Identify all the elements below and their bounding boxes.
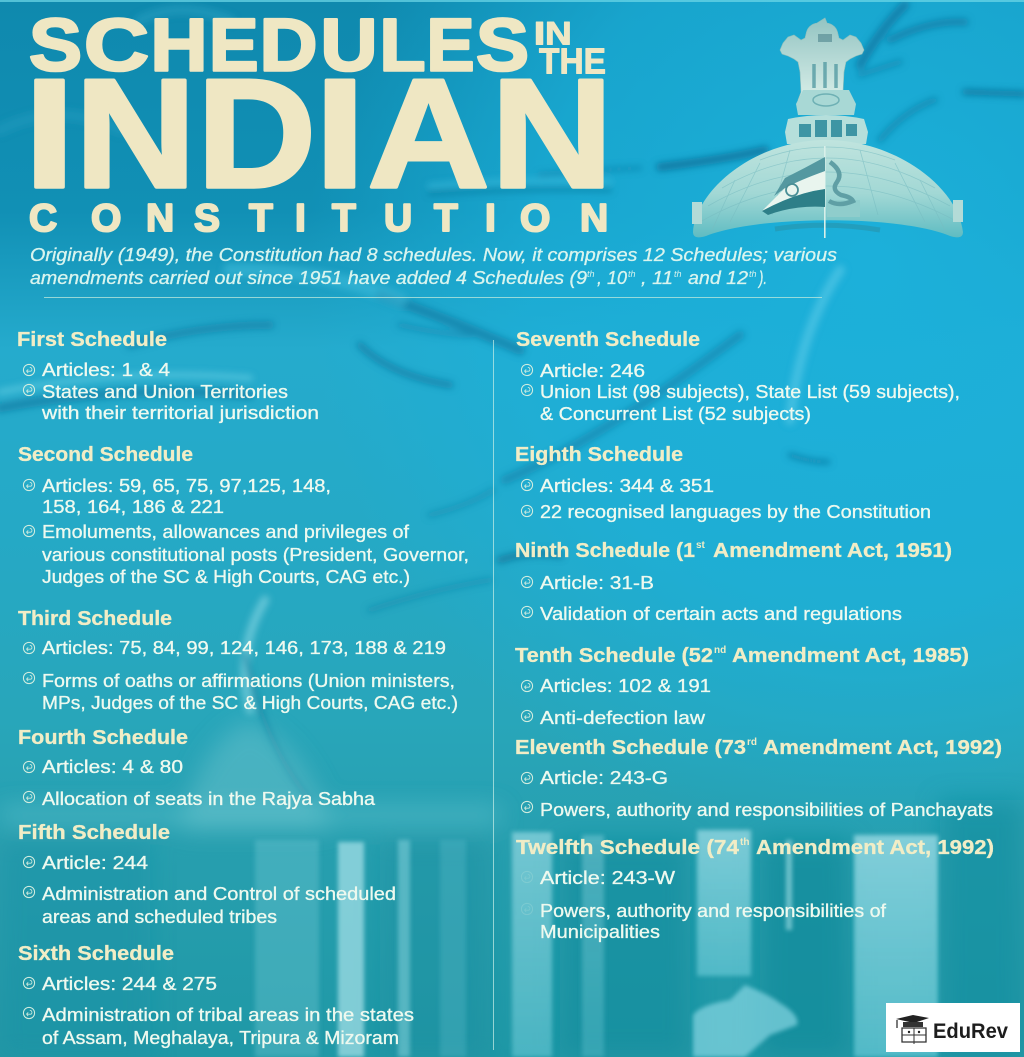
panel: right column — [515, 329, 1002, 942]
First Schedule: First Schedule — [17, 329, 167, 351]
title small: IN THE — [534, 16, 606, 82]
title line: SCHEDULES: E — [209, 4, 258, 86]
logo: EduRev: EduRev — [933, 1020, 1008, 1043]
Tenth Schedule — [515, 645, 969, 728]
Fifth Schedule — [18, 822, 396, 927]
title line: SCHEDULES — [29, 4, 529, 86]
Eleventh Schedule: Eleventh Schedule (73 — [515, 737, 746, 759]
Third Schedule: MPs, Judges of the SC & High Courts, CAG etc.) — [42, 693, 458, 713]
title line: SCHEDULES: L — [380, 4, 426, 86]
Tenth Schedule: Articles: 102 & 191 — [540, 676, 711, 696]
Third Schedule: Third Schedule — [18, 608, 172, 630]
panel: left column — [17, 329, 469, 1048]
Seventh Schedule: Article: 246 — [540, 361, 645, 381]
Ninth Schedule: Article: 31-B — [540, 573, 654, 593]
Ninth Schedule: Amendment Act, 1951) — [713, 540, 952, 562]
ornament on dome — [827, 162, 860, 217]
title line: SCHEDULES: S — [29, 4, 82, 86]
Seventh Schedule: Seventh Schedule — [516, 329, 700, 351]
Fourth Schedule — [18, 727, 376, 809]
intro text: , 11 — [641, 268, 673, 288]
title line: INDIAN: D — [197, 47, 316, 220]
Tenth Schedule: nd — [714, 645, 726, 656]
title line: INDIAN — [24, 47, 613, 220]
intro text: Originally (1949), the Constitution had 8 schedules. Now, it comprises 12 Schedules; various — [30, 245, 837, 265]
Fifth Schedule: areas and scheduled tribes — [42, 907, 277, 927]
Eleventh Schedule: rd — [747, 737, 757, 748]
title line: INDIAN: N — [491, 47, 613, 220]
Twelfth Schedule: Municipalities — [540, 922, 660, 942]
Sixth Schedule — [18, 943, 414, 1048]
dome — [692, 140, 963, 237]
First Schedule: Articles: 1 & 4 — [42, 360, 170, 380]
Seventh Schedule: & Concurrent List (52 subjects) — [540, 404, 811, 424]
intro text: and 12 — [688, 268, 748, 288]
Eighth Schedule: Eighth Schedule — [515, 444, 683, 466]
Fourth Schedule: Fourth Schedule — [18, 727, 188, 749]
Third Schedule: Articles: 75, 84, 99, 124, 146, 173, 188 & 219 — [42, 638, 446, 658]
Eleventh Schedule: Powers, authority and responsibilities of Panchayats — [540, 800, 993, 820]
icon: graduation cap mascot — [896, 1015, 929, 1044]
title small: IN THE: I — [534, 16, 545, 52]
First Schedule: States and Union Territories — [42, 382, 288, 402]
title line: INDIAN: I — [314, 47, 366, 220]
icon: lion capital — [780, 18, 864, 100]
intro text — [30, 245, 837, 288]
illustration: dome with national emblem and flag — [692, 18, 963, 238]
Ninth Schedule: Ninth Schedule (1 — [515, 540, 695, 562]
Tenth Schedule: Anti-defection law — [540, 708, 706, 728]
Second Schedule: 158, 164, 186 & 221 — [42, 497, 224, 517]
Twelfth Schedule: Powers, authority and responsibilities of — [540, 901, 887, 921]
Fifth Schedule: Administration and Control of scheduled — [42, 884, 396, 904]
Second Schedule — [18, 444, 469, 587]
Third Schedule: Forms of oaths or affirmations (Union ministers, — [42, 671, 455, 691]
Eighth Schedule: 22 recognised languages by the Constitution — [540, 502, 931, 522]
Twelfth Schedule: Article: 243-W — [540, 868, 675, 888]
icon: flag on pole — [762, 146, 826, 238]
title line: SCHEDULES: E — [426, 4, 474, 86]
Fifth Schedule: Fifth Schedule — [18, 822, 170, 844]
First Schedule: with their territorial jurisdiction — [41, 403, 319, 423]
Twelfth Schedule — [516, 837, 994, 942]
title line: SCHEDULES: C — [84, 4, 149, 86]
Eleventh Schedule — [515, 737, 1002, 820]
Tenth Schedule: Amendment Act, 1985) — [732, 645, 969, 667]
Eleventh Schedule: Article: 243-G — [540, 768, 668, 788]
First Schedule — [17, 329, 319, 423]
Seventh Schedule — [516, 329, 960, 424]
title line: SCHEDULES: D — [260, 4, 318, 86]
title line: SCHEDULES: H — [150, 4, 208, 86]
intro text: amendments carried out since 1951 have added 4 Schedules (9 — [30, 268, 587, 288]
Ninth Schedule: st — [696, 540, 706, 551]
Third Schedule — [18, 608, 458, 713]
title line: CONSTITUTION: CONSTITUTION — [29, 197, 608, 240]
window drum — [785, 115, 868, 144]
drum below emblem — [796, 90, 856, 115]
title small: IN THE: N — [545, 16, 572, 52]
logo: EduRev — [886, 1003, 1020, 1052]
title small: IN THE: THE — [539, 40, 606, 82]
intro text: th — [587, 269, 595, 279]
Seventh Schedule: Union List (98 subjects), State List (59 subjects), — [540, 382, 960, 402]
title line: INDIAN: I — [24, 47, 75, 220]
intro text: th — [749, 269, 757, 279]
intro text: th — [674, 269, 682, 279]
Eighth Schedule: Articles: 344 & 351 — [540, 476, 714, 496]
title line: SCHEDULES: U — [320, 4, 378, 86]
Second Schedule: Emoluments, allowances and privileges of — [42, 522, 410, 542]
Ninth Schedule — [515, 540, 952, 624]
title line: SCHEDULES: S — [476, 4, 529, 86]
Second Schedule: Judges of the SC & High Courts, CAG etc.) — [42, 567, 410, 587]
Tenth Schedule: Tenth Schedule (52 — [515, 645, 713, 667]
Sixth Schedule: of Assam, Meghalaya, Tripura & Mizoram — [42, 1028, 399, 1048]
Second Schedule: various constitutional posts (President, Governor, — [42, 545, 469, 565]
intro text: ). — [758, 268, 767, 288]
Fourth Schedule: Articles: 4 & 80 — [42, 757, 183, 777]
Eleventh Schedule: Amendment Act, 1992) — [763, 737, 1002, 759]
Second Schedule: Articles: 59, 65, 75, 97,125, 148, — [42, 476, 331, 496]
Second Schedule: Second Schedule — [18, 444, 193, 466]
title line: INDIAN: N — [75, 47, 196, 220]
Twelfth Schedule: Twelfth Schedule (74 — [516, 837, 740, 859]
Twelfth Schedule: Amendment Act, 1992) — [756, 837, 994, 859]
Sixth Schedule: Sixth Schedule — [18, 943, 174, 965]
Ninth Schedule: Validation of certain acts and regulations — [540, 604, 902, 624]
intro text: , 10 — [597, 268, 627, 288]
Sixth Schedule: Administration of tribal areas in the states — [42, 1005, 414, 1025]
title line: INDIAN: A — [368, 47, 490, 220]
Fourth Schedule: Allocation of seats in the Rajya Sabha — [42, 789, 376, 809]
Sixth Schedule: Articles: 244 & 275 — [42, 974, 217, 994]
Eighth Schedule — [515, 444, 931, 522]
intro text: th — [628, 269, 636, 279]
Twelfth Schedule: th — [740, 837, 749, 848]
title — [24, 4, 613, 240]
Fifth Schedule: Article: 244 — [42, 853, 148, 873]
